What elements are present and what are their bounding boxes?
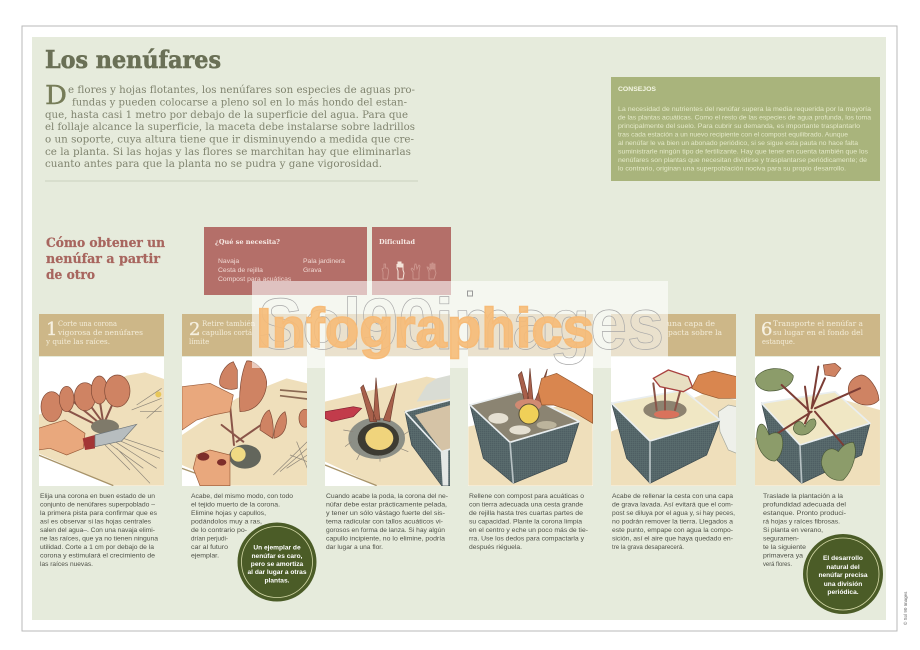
callout: step 6: periódica. [827, 589, 859, 596]
step 1 header: y quite las raíces. [45, 338, 110, 346]
step 4 header [468, 314, 593, 356]
panel: qué se necesita: Cesta de rejilla [218, 267, 263, 274]
callout: step 2: pero se amortiza [251, 561, 304, 568]
step 2 text: car al futuro [191, 544, 229, 551]
intro paragraph: cuanto antes para que la planta no se pudra y gane vigorosidad. [45, 158, 382, 170]
step 2 text: Acabe, del mismo modo, con todo [191, 493, 294, 500]
step 5 text [612, 493, 735, 551]
credit: © Sol 90 Images [902, 591, 908, 625]
intro paragraph: D [45, 81, 67, 111]
step 6 text: Si planta en verano, [763, 527, 823, 534]
section heading: Cómo obtener un [46, 236, 166, 251]
step 2 text: el tejido muerto de la corona. [191, 502, 280, 508]
step 1 text: Elija una corona en buen estado de un [40, 493, 156, 500]
step 6 text: estanque. Pronto produci- [763, 510, 846, 517]
step 1 text: las raíces nuevas. [40, 561, 93, 568]
step 1 header: 1 [46, 319, 57, 340]
panel: dificultad: Dificultad [379, 238, 415, 246]
step 5 text: no podrán remover la tierra. Llegados a [612, 518, 734, 526]
step 6 header: 6 [761, 319, 772, 340]
step 1 header: Corte una corona [58, 320, 117, 328]
step 2 text: de lo contrario po- [191, 527, 247, 534]
step 3 text [326, 493, 448, 551]
step 1 text: ne las raíces, que ya no tienen ninguna [40, 536, 159, 542]
step 1 header [39, 314, 164, 356]
step 2 text [191, 493, 294, 560]
step 4 text [469, 493, 588, 551]
callout: step 6: El desarrollo [823, 555, 863, 562]
panel: consejos: CONSEJOS [618, 86, 656, 93]
callout: step 2: plantas. [265, 578, 290, 584]
step 6 header [755, 314, 880, 356]
step 3 text: dar lugar a una flor. [326, 544, 383, 551]
panel: consejos: La necesidad de nutrientes del nenúfar supera la media requerida por la mayoría [618, 106, 872, 113]
step 5 header: una capa de [667, 320, 715, 328]
panel: qué se necesita [204, 227, 367, 295]
watermark: Sol90images [258, 285, 664, 365]
callout: step 6: nenúfar precisa [818, 572, 868, 579]
panel: qué se necesita: ¿Qué se necesita? [215, 238, 280, 246]
step 3 text: y tener un sólo vástago fuerte del sis- [326, 510, 445, 517]
panel: consejos: al nenúfar le va bien un abonado periódico, si se sigue esta pauta no hace falta [618, 140, 859, 147]
step 1 text: corona y estimulará el crecimiento de [40, 552, 156, 560]
callout: step 6 [803, 534, 883, 614]
step 1 text: salen del agua–. Con una navaja elimi- [40, 527, 155, 534]
panel: consejos: de las plantas acuáticas. Como el resto de las especies de agua profunda, los toma [618, 114, 872, 122]
step 5 text: post se diluya por el agua y, si hay peces, [612, 510, 735, 517]
step 2 header: 2 [189, 319, 200, 340]
step 5 text: Acabe de rellenar la cesta con una capa [612, 493, 734, 500]
illustration: step 3 pruned crown [325, 357, 451, 486]
step 3 header [325, 314, 450, 356]
illustration: step 6 finished plant [754, 357, 880, 486]
intro paragraph: el follaje alcance la superficie, la maceta debe instalarse sobre ladrillos [45, 121, 415, 133]
step 3 text: gorosos en forma de lanza. Si hay algún [326, 527, 446, 534]
intro paragraph: ce la planta. Si las hojas y las flores se marchitan hay que eliminarlas [45, 146, 411, 158]
step 2 text: podándolos muy a ras, [191, 518, 262, 526]
step 5 text: este punto, empape con agua la compo- [612, 527, 733, 534]
step 6 text: profundidad adecuada del [763, 502, 846, 508]
callout: step 6: una división [824, 581, 862, 588]
step 4 text: su capacidad. Plante la corona limpia [469, 518, 583, 526]
step 2 header: capullos cortá [202, 329, 252, 337]
panel: consejos [611, 77, 880, 181]
intro paragraph: o un soporte, cuya altura tiene que ir disminuyendo a medida que cre- [45, 134, 414, 146]
illustration: step 4 planting in the basket [468, 357, 593, 486]
step 3 text: Cuando acabe la poda, la corona del ne- [326, 493, 448, 500]
title: Los nenúfares [45, 45, 221, 74]
step 6 text [763, 493, 846, 568]
panel: qué se necesita: Grava [303, 267, 322, 274]
intro paragraph: fundas y pueden colocarse a pleno sol en lo más hondo del estan- [72, 96, 407, 108]
panel: qué se necesita: Navaja [218, 258, 239, 265]
intro paragraph: que, hasta casi 1 metro por debajo de la superficie del agua. Para que [45, 109, 408, 121]
step 2 text: Elimine hojas y capullos, [191, 510, 266, 517]
step 1 text [40, 493, 159, 568]
intro paragraph [45, 81, 415, 170]
watermark: Infographics [256, 296, 594, 359]
panel: consejos: lo contrario, originan una superpoblación nociva para su propio desarrollo. [618, 166, 846, 172]
step 6 header: su lugar en el fondo del [773, 329, 864, 337]
step 3 text: capullo incipiente, no lo elimine, podría [326, 536, 446, 542]
panel: consejos: nenúfares son plantas que necesitan dividirse y trasplantarse periódicamente; de [618, 157, 868, 164]
callout: step 2: al dar lugar a otras [248, 569, 307, 576]
callout: step 2 [238, 522, 316, 602]
step 4 text: después riéguela. [469, 544, 522, 551]
step 1 text: la primera pista para confirmar que es [40, 510, 157, 517]
step 6 text: seguramen- [763, 536, 799, 542]
step 5 text: tre la grava desaparecerá. [612, 544, 684, 551]
step 1 text: utilidad. Corte a 1 cm por debajo de la [40, 544, 155, 551]
step 2 text: ejemplar. [191, 552, 219, 560]
step 6 header: estanque. [762, 338, 795, 346]
step 3 text: núfar debe estar prácticamente pelada, [326, 502, 447, 508]
step 3 text: tema radicular con tallos acuáticos vi- [326, 518, 443, 526]
panel: consejos: principalmente del suelo. Para cubrir su demanda, es importante trasplantarlo [618, 123, 861, 130]
step 6 text: Traslade la plantación a la [763, 493, 844, 500]
panel: qué se necesita: Compost para acuáticas [218, 276, 292, 283]
step 2 header [182, 314, 307, 356]
illustration: step 5 adding gravel [611, 357, 737, 486]
callout: step 6: natural del [826, 564, 860, 571]
illustration: step 1 cutting the roots [38, 357, 164, 486]
step 4 text: rra. Use los dedos para compactarla y [469, 536, 585, 542]
step 5 text: de grava lavada. Así evitará que el com- [612, 502, 733, 508]
section heading [46, 236, 166, 283]
step 6 text: te la siguiente [763, 544, 807, 551]
section heading: nenúfar a partir [46, 252, 160, 267]
panel: dificultad [372, 227, 451, 295]
step 6 text: verá flores. [763, 561, 792, 568]
panel: consejos: tras cada estación a un nuevo recipiente con el compost equilibrado. Aunque [618, 132, 849, 138]
callout: step 2: Un ejemplar de [253, 544, 301, 552]
step 1 text: conjunto de nenúfares superpoblado – [40, 502, 156, 508]
step 4 text: en el centro y eche un poco más de tie- [469, 527, 588, 534]
step 5 header [611, 314, 736, 356]
step 1 text: así es observar si las hojas centrales [40, 518, 151, 526]
step 1 header: vigorosa de nenúfares [57, 329, 143, 337]
step 4 text: con tierra adecuada una cesta grande [469, 502, 584, 508]
panel: consejos: suministrarle ningún tipo de fertilizante. Hay que tener en cuenta también que los [618, 148, 868, 156]
step 5 text: sición, así el aire que haya quedado en- [612, 536, 733, 542]
step 2 text: drían perjudi- [191, 536, 228, 542]
illustration: step 2 removing leaves [182, 357, 311, 486]
icon: difficulty hands [382, 262, 436, 279]
step 4 text: de rejilla hasta tres cuartas partes de [469, 510, 584, 517]
step 5 header: pacta sobre la [668, 329, 722, 337]
callout: step 2: nenúfar es caro, [252, 553, 303, 560]
step 4 text: Rellene con compost para acuáticas o [469, 493, 585, 500]
step 2 header: límite [189, 338, 209, 346]
intro paragraph: e flores y hojas flotantes, los nenúfares son especies de aguas pro- [68, 84, 415, 96]
step 6 header: Transporte el nenúfar a [773, 320, 863, 328]
step 6 text: primavera ya [763, 552, 804, 560]
step 2 header: Retire también [202, 320, 256, 328]
section heading: de otro [46, 268, 95, 283]
panel: qué se necesita: Pala jardinera [303, 258, 345, 265]
step 6 text: rá hojas y raíces fibrosas. [763, 518, 840, 526]
